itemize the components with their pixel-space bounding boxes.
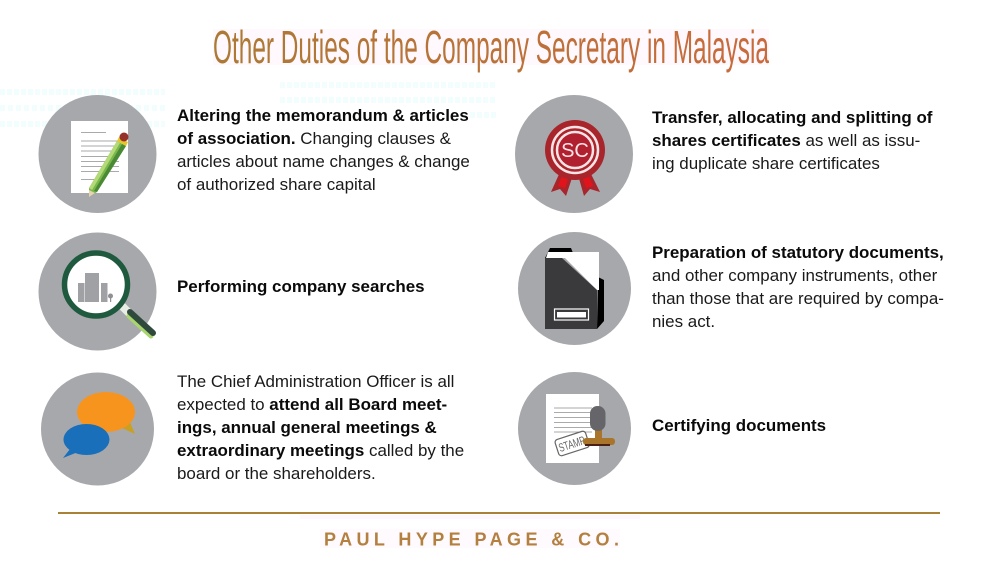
icon: document and pencil bbox=[38, 95, 156, 213]
text: statutory documents: and other company instruments, other bbox=[652, 266, 938, 285]
panel: altering memorandum bbox=[38, 95, 470, 213]
text: certifying documents: Certifying documents bbox=[652, 416, 826, 435]
text: board meetings: extraordinary meetings called by the bbox=[177, 441, 464, 460]
text: board meetings: ings, annual general meetings & bbox=[177, 418, 437, 437]
text: share certificates: shares certificates as well as issu- bbox=[652, 131, 920, 150]
text: altering memorandum: Altering the memorandum & articles bbox=[177, 106, 469, 125]
text: altering memorandum: articles about name changes & change bbox=[177, 152, 470, 171]
text: share certificates: ing duplicate share certificates bbox=[652, 154, 880, 173]
icon: rubber stamp on document bbox=[518, 372, 631, 485]
text: share certificates: Transfer, allocating and splitting of bbox=[652, 108, 933, 127]
panel: statutory documents bbox=[518, 232, 944, 345]
text: altering memorandum: of association. Changing clauses & bbox=[177, 129, 452, 148]
panel: share certificates bbox=[515, 95, 933, 213]
icon: speech bubbles bbox=[41, 372, 154, 486]
text: share certificates bbox=[652, 108, 933, 173]
footer: company name: PAUL HYPE PAGE & CO. bbox=[324, 530, 619, 550]
text: board meetings: board or the shareholders. bbox=[177, 464, 376, 483]
text: statutory documents bbox=[652, 243, 944, 331]
text: altering memorandum: of authorized share capital bbox=[177, 175, 376, 194]
panel: company searches bbox=[38, 232, 425, 350]
text: company searches: Performing company searches bbox=[177, 277, 425, 296]
footer rule bbox=[58, 512, 940, 514]
text: board meetings: The Chief Administration Officer is all bbox=[177, 372, 454, 391]
text: board meetings bbox=[177, 372, 464, 483]
text: board meetings: expected to attend all Board meet- bbox=[177, 395, 447, 414]
icon: SC rosette bbox=[515, 95, 633, 213]
text: statutory documents: than those that are required by compa- bbox=[652, 289, 944, 308]
icon: SC rosette: SC bbox=[561, 140, 589, 162]
text: statutory documents: nies act. bbox=[652, 312, 715, 331]
icon: magnifying glass bbox=[38, 232, 156, 350]
icon: file folder bbox=[518, 232, 631, 345]
panel: certifying documents bbox=[518, 372, 826, 485]
icon: rubber stamp on document: STAMP bbox=[557, 433, 587, 455]
text: altering memorandum bbox=[177, 106, 470, 194]
panel: board meetings bbox=[41, 372, 464, 486]
text: statutory documents: Preparation of statutory documents, bbox=[652, 243, 944, 262]
